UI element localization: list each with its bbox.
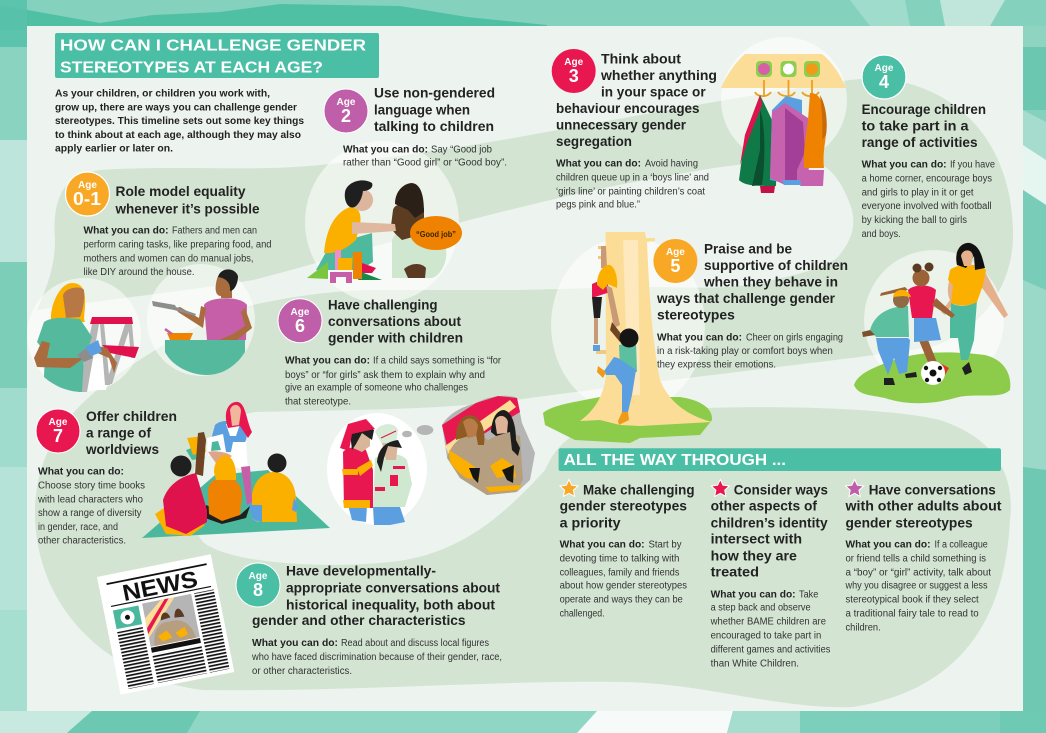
body: age 2: Say “Good job	[431, 145, 492, 156]
heading: age 4: range of activities	[862, 134, 978, 150]
body: age 0-1	[84, 226, 272, 278]
body: age 7: other characteristics.	[38, 536, 126, 547]
heading: age 3	[556, 50, 717, 149]
heading and body: consider ways: Consider ways	[734, 481, 828, 497]
heading: age 2: talking to children	[374, 118, 494, 134]
heading and body: consider ways: encouraged to take part in	[711, 631, 821, 642]
intro text: As your children, or children you work with,	[55, 89, 270, 100]
body: age 4: What you can do:	[862, 160, 947, 171]
heading: age 8	[252, 562, 500, 628]
heading bar	[55, 33, 379, 78]
body: age 8: who have faced discrimination because of their gender, race,	[251, 652, 502, 663]
heading and body: have conversations	[844, 481, 1002, 634]
heading: age 6: conversations about	[328, 313, 461, 329]
heading: age 6: gender with children	[328, 329, 463, 345]
heading: age 6	[328, 296, 463, 345]
heading and body: make challenging: What you can do:	[560, 540, 645, 551]
icon: red star	[711, 480, 729, 496]
heading: age 5: Praise and be	[704, 240, 792, 256]
illustration: man cooking	[152, 269, 252, 375]
section: age 5	[653, 239, 848, 371]
heading and body: consider ways: than White Children.	[711, 659, 799, 670]
body: age 2	[343, 145, 507, 169]
section: age 3	[552, 49, 717, 211]
light circle behind cooking illustration	[147, 264, 255, 376]
badge: age 8: Age	[249, 571, 268, 582]
heading: age 5	[656, 240, 848, 322]
heading and body: have conversations: a “boy” or “girl” activity, talk about	[846, 568, 991, 579]
illustration: newspaper	[97, 554, 234, 695]
body: age 5: Cheer on girls engaging	[746, 333, 843, 344]
body: age 3: What you can do:	[556, 159, 641, 170]
body: age 0-1: like DIY around the house.	[84, 267, 194, 278]
body: age 4: by kicking the ball to girls	[862, 215, 967, 226]
body: age 0-1: mothers and women can do manual jobs,	[84, 254, 254, 265]
heading: age 4: to take part in a	[862, 117, 969, 133]
body: age 8: Read about and discuss local figures	[341, 638, 489, 649]
heading: age 3: unnecessary gender	[556, 116, 687, 132]
heading: age 0-1: whenever it’s possible	[115, 200, 260, 216]
section: age 2	[324, 85, 507, 169]
heading: age 0-1: Role model equality	[116, 183, 246, 199]
heading: age 5: ways that challenge gender	[656, 290, 836, 306]
heading: age 3: behaviour encourages	[556, 100, 700, 116]
badge: age 0-1: 0-1	[73, 189, 101, 209]
body: age 4: If you have	[950, 160, 995, 171]
intro text: stereotypes. This timeline sets out some key things	[55, 116, 304, 127]
badge: age 4: Age	[875, 63, 894, 74]
heading and body: consider ways: different games and activities	[711, 645, 830, 656]
body: age 2: What you can do:	[343, 145, 428, 156]
heading and body: consider ways: a step back and observe	[711, 603, 811, 614]
heading and body: have conversations: stereotypical book if they select	[846, 595, 979, 606]
badge: age 5: Age	[666, 247, 685, 258]
body: age 7	[37, 466, 145, 547]
body: age 8	[251, 638, 502, 677]
heading: age 2	[374, 85, 495, 134]
badge: age 4: 4	[879, 72, 889, 92]
badge: age 2	[324, 89, 368, 133]
heading and body: consider ways: children’s identity	[711, 514, 828, 530]
section: age 7	[36, 408, 177, 547]
heading and body: make challenging: gender stereotypes	[560, 497, 687, 513]
heading bar: all the way through: ALL THE WAY THROUGH ...	[564, 452, 786, 469]
illustration: child and adult	[307, 180, 462, 283]
body: age 6: give an example of someone who challenges	[285, 383, 468, 394]
badge: age 4	[862, 55, 906, 99]
badge: age 8: 8	[253, 580, 263, 600]
section: age 0-1	[66, 172, 272, 278]
heading: age 3: Think about	[601, 50, 681, 66]
heading: age 3: whether anything	[600, 67, 717, 83]
section: age 6	[278, 296, 502, 408]
section: age 4	[862, 55, 995, 240]
heading: age 7: a range of	[86, 425, 151, 441]
heading and body: make challenging: Start by	[648, 540, 682, 551]
heading: age 8: Have developmentally-	[286, 562, 436, 578]
heading: age 2: language when	[374, 101, 470, 117]
heading and body: make challenging: Make challenging	[583, 481, 694, 497]
illustration: coat pegs	[721, 54, 846, 193]
body: age 2: rather than “Good girl” or “Good boy”.	[343, 158, 507, 169]
icon: amber star	[560, 480, 578, 496]
body: age 6	[285, 356, 502, 408]
body: age 3: children queue up in a ‘boys line’ and	[556, 173, 709, 184]
thought cloud: women firefighters	[442, 396, 535, 495]
badge: age 7: Age	[49, 417, 68, 428]
badge: age 5: 5	[670, 256, 680, 276]
intro text: to think about at each age, although they may also	[55, 130, 301, 141]
badge: age 3	[552, 49, 596, 93]
heading: age 7	[85, 408, 177, 457]
badge: age 8	[236, 563, 280, 607]
body: age 4	[862, 160, 995, 240]
heading and body: have conversations: or friend tells a child something is	[846, 554, 986, 565]
body: age 7: show a range of diversity	[38, 508, 142, 519]
heading and body: make challenging	[560, 481, 694, 620]
illustration: football game	[854, 243, 1010, 403]
badge: age 6: 6	[295, 316, 305, 336]
illustration: child and adult: “Good job”	[416, 229, 456, 239]
heading: age 3: segregation	[556, 133, 632, 149]
heading: age 4: Encourage children	[862, 101, 986, 117]
body: age 3: pegs pink and blue.”	[556, 200, 640, 211]
heading and body: consider ways: how they are	[711, 547, 797, 563]
body: age 5	[657, 333, 843, 371]
light circle behind football	[864, 250, 1004, 390]
body: age 7: Choose story time books	[38, 481, 145, 492]
heading: age 8: historical inequality, both about	[286, 596, 495, 612]
icon: purple star	[846, 480, 864, 496]
body: age 4: and boys.	[862, 229, 901, 240]
heading: age 8: gender and other characteristics	[252, 612, 466, 628]
heading and body: have conversations: What you can do:	[846, 540, 930, 551]
intro text: apply earlier or later on.	[55, 144, 173, 155]
heading and body: make challenging: challenged.	[560, 609, 605, 620]
body: age 8: or other characteristics.	[252, 666, 352, 677]
heading and body: have conversations: If a colleague	[934, 540, 988, 551]
light circle behind coat pegs	[721, 37, 847, 163]
heading and body: make challenging: colleagues, family and friends	[560, 568, 679, 579]
illustration: story time group	[142, 402, 330, 538]
heading and body: have conversations: with other adults about	[844, 497, 1002, 513]
heading and body: consider ways: treated	[711, 563, 759, 579]
body: age 8: What you can do:	[252, 638, 338, 649]
body: age 7: What you can do:	[38, 466, 124, 477]
badge: age 3: 3	[569, 66, 579, 86]
light circle behind age 2 illustration	[305, 141, 459, 303]
body: age 0-1: perform caring tasks, like preparing food, and	[84, 240, 272, 251]
body: age 5: they express their emotions.	[657, 360, 776, 371]
badge: age 6: Age	[291, 307, 310, 318]
heading: age 7: worldviews	[85, 441, 159, 457]
heading: age 7: Offer children	[86, 408, 177, 424]
badge: age 7: 7	[53, 426, 63, 446]
intro text	[55, 89, 304, 155]
heading and body: make challenging: a priority	[560, 514, 621, 530]
heading and body: have conversations: Have conversations	[869, 481, 996, 497]
heading: age 0-1	[115, 183, 260, 216]
body: age 7: in gender, race, and	[38, 522, 118, 533]
body: age 4: and girls to play in it or get	[862, 188, 974, 199]
heading and body: consider ways	[710, 481, 830, 670]
body: age 6: If a child says something is “for	[373, 356, 502, 367]
illustration: firefighter and chef children	[327, 413, 427, 525]
badge: age 7	[36, 409, 80, 453]
badge: age 3: Age	[564, 57, 584, 68]
heading and body: consider ways: whether BAME children are	[710, 617, 826, 628]
body: age 0-1: Fathers and men can	[172, 226, 257, 237]
heading: age 3: in your space or	[601, 83, 706, 99]
heading: age 5: stereotypes	[657, 306, 735, 322]
body: age 6: that stereotype.	[285, 397, 351, 408]
light circle behind tree	[551, 237, 705, 413]
heading and body: have conversations: a traditional fairy tale to read to	[846, 609, 979, 620]
body: age 3: Avoid having	[645, 159, 698, 170]
heading: age 6: Have challenging	[328, 296, 438, 312]
body: age 4: a home corner, encourage boys	[862, 174, 992, 185]
body: age 3: ‘girls line’ or painting children’s coat	[556, 187, 705, 198]
body: age 5: in a risk-taking play or comfort boys when	[657, 346, 833, 357]
heading bar: STEREOTYPES AT EACH AGE?	[60, 60, 323, 77]
column: consider ways	[710, 480, 830, 670]
illustration: newspaper: NEWS	[120, 566, 200, 606]
badge: age 2: Age	[337, 97, 356, 108]
badge: age 6	[278, 299, 322, 343]
heading: age 8: appropriate conversations about	[286, 579, 500, 595]
badge: age 0-1: Age	[78, 180, 97, 191]
illustration: woman with ladder	[34, 283, 139, 392]
light circle behind DIY illustration	[27, 278, 141, 392]
heading: age 5: when they behave in	[703, 273, 838, 289]
heading: age 5: supportive of children	[704, 257, 848, 273]
body: age 7: with lead characters who	[37, 495, 143, 506]
thought bubbles	[402, 425, 433, 437]
heading and body: make challenging: about how gender stereotypes	[560, 581, 687, 592]
heading and body: make challenging: devoting time to talking with	[560, 554, 679, 565]
body: age 6: What you can do:	[285, 356, 370, 367]
badge: age 2: 2	[341, 106, 351, 126]
heading and body: consider ways: intersect with	[711, 530, 802, 546]
badge: age 0-1	[66, 172, 110, 216]
column: make challenging	[560, 480, 694, 620]
heading and body: consider ways: What you can do:	[711, 590, 796, 601]
body: age 4: everyone involved with football	[862, 201, 992, 212]
section: age 8	[236, 562, 502, 677]
heading bar: HOW CAN I CHALLENGE GENDER	[60, 38, 367, 55]
column: have conversations	[844, 480, 1002, 634]
body: age 6: boys” or “for girls” ask them to explain why and	[285, 370, 485, 381]
heading and body: have conversations: children.	[846, 623, 881, 634]
body: age 0-1: What you can do:	[84, 226, 168, 237]
intro text: grow up, there are ways you can challenge gender	[55, 103, 297, 114]
heading: age 2: Use non-gendered	[374, 85, 495, 101]
heading bar: all the way through	[559, 448, 1001, 471]
body: age 5: What you can do:	[657, 333, 742, 344]
heading and body: make challenging: operate and ways they can be	[560, 595, 683, 606]
heading and body: have conversations: gender stereotypes	[846, 514, 973, 530]
heading and body: consider ways: other aspects of	[711, 497, 817, 513]
heading and body: have conversations: why you disagree or suggest a less	[845, 581, 988, 592]
heading and body: consider ways: Take	[799, 590, 819, 601]
badge: age 5	[653, 239, 697, 283]
body: age 3	[556, 159, 709, 211]
illustration: climbing a tree	[543, 232, 712, 443]
heading: age 4	[862, 101, 986, 150]
